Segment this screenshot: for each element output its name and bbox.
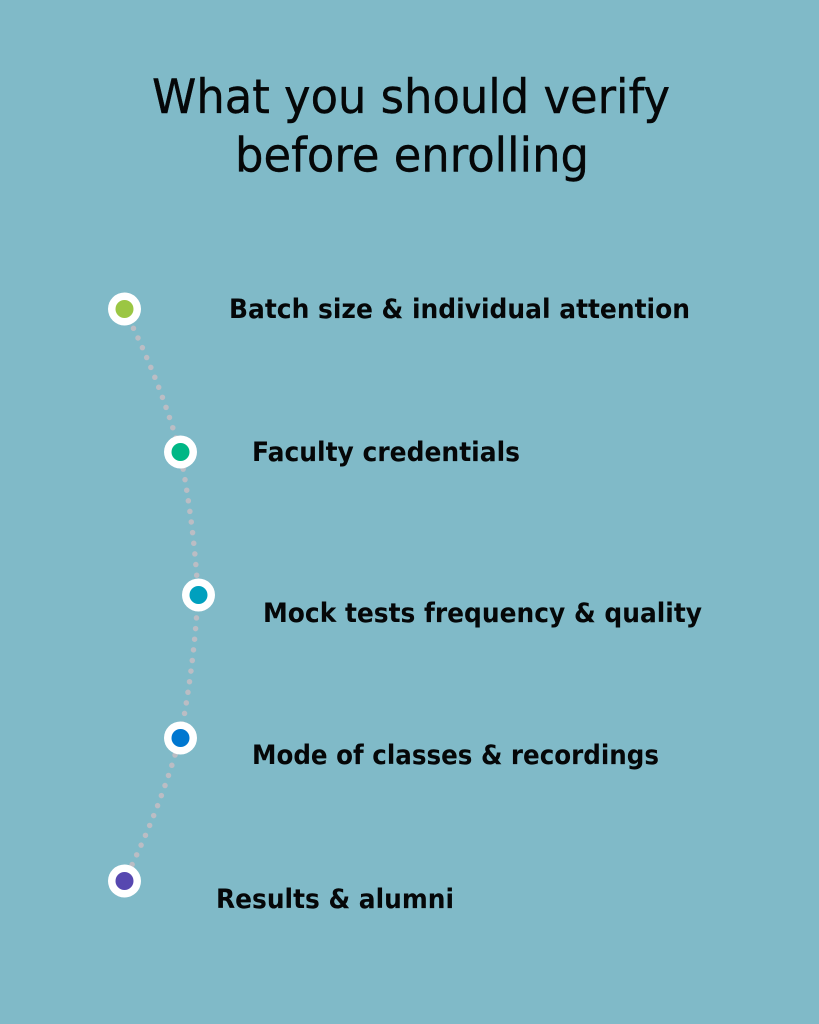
step 4 marker [164,722,197,754]
step 1 label: Batch size & individual attention [229,294,690,325]
step 3 label: Mock tests frequency & quality [263,598,702,629]
step 2 marker [164,436,197,468]
step 5 label: Results & alumni [216,884,454,915]
title: before enrolling [235,128,589,184]
title: What you should verify [152,70,670,125]
step 4 label: Mode of classes & recordings [252,740,659,771]
step 1 marker [108,292,141,326]
title [152,70,670,184]
step 3 marker [182,578,215,612]
step 2 label: Faculty credentials [252,437,520,468]
dotted connector path [124,309,198,881]
step 5 marker [108,864,141,898]
